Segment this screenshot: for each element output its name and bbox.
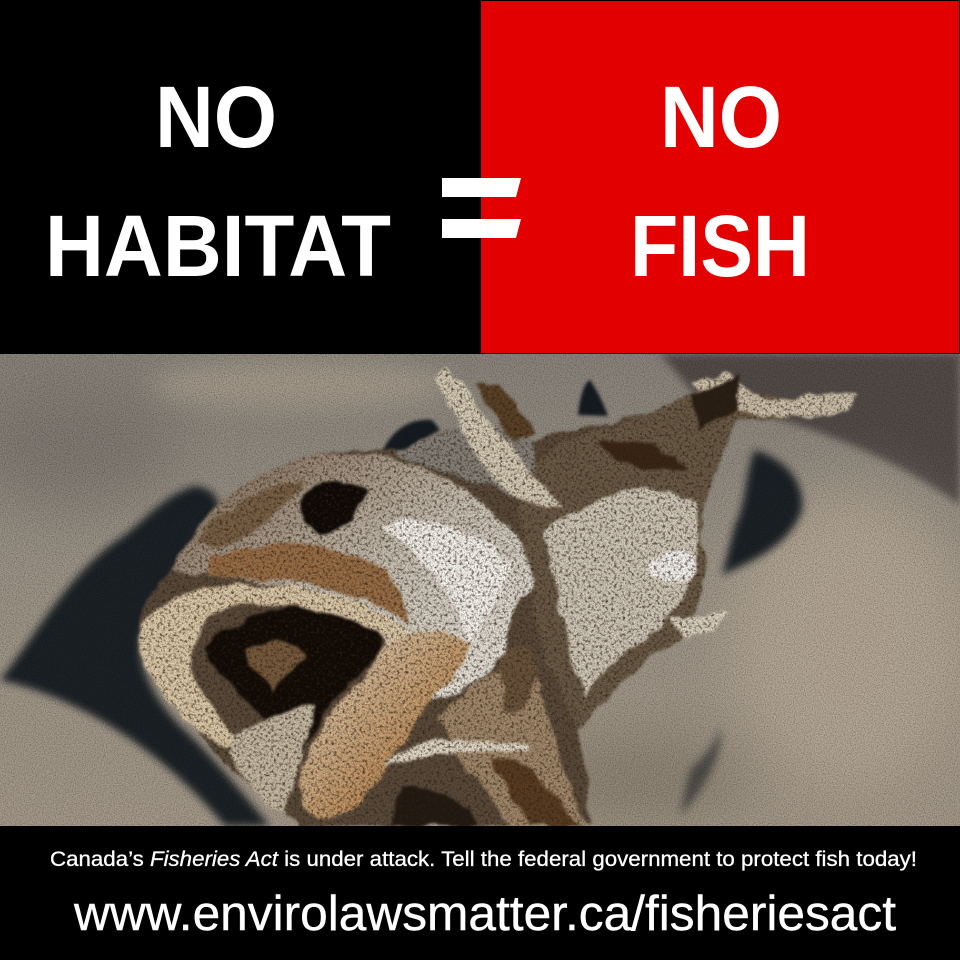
skull xyxy=(170,453,531,700)
eye socket xyxy=(302,484,366,535)
heading: no habitat: HABITAT xyxy=(45,198,391,295)
website url: www.envirolawsmatter.ca/fisheriesact xyxy=(73,887,896,941)
tail section xyxy=(518,394,792,729)
call to action: Canada’s Fisheries Act is under attack. Tell the federal government to protect fish today! xyxy=(50,848,917,871)
fins xyxy=(433,364,565,510)
heading: no habitat: NO xyxy=(155,69,277,166)
footer band xyxy=(0,826,960,960)
sand background xyxy=(0,354,960,826)
black panel: no habitat xyxy=(0,0,481,354)
fish body xyxy=(137,364,858,826)
lower jaw xyxy=(300,630,470,820)
fish shadow xyxy=(0,380,802,826)
gill rakers xyxy=(245,641,305,695)
heading: no fish xyxy=(630,69,810,295)
heading: no habitat xyxy=(45,69,391,295)
sand tone variation xyxy=(0,354,960,820)
body underlay xyxy=(138,406,664,826)
heading: no fish: NO xyxy=(660,69,782,166)
red panel: no fish xyxy=(481,1,959,353)
skull highlights xyxy=(380,520,515,640)
upper jaw rim xyxy=(137,585,415,750)
photo: dead fish on sand xyxy=(0,354,960,826)
equals sign xyxy=(442,178,521,238)
mouth opening xyxy=(205,607,384,755)
heading: no fish: FISH xyxy=(630,198,810,295)
jaw membrane xyxy=(230,705,315,815)
lower debris xyxy=(440,668,585,826)
sand grain texture xyxy=(0,354,960,826)
